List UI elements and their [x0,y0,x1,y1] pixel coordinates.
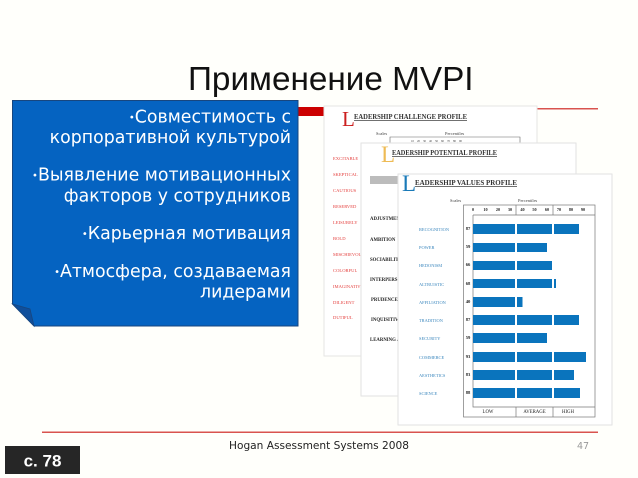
point 1: Совместимость с [135,108,291,128]
scores: 59 [466,244,471,249]
scale labels: TRADITION [419,318,444,323]
scale labels: ALTRUISTIC [419,282,444,287]
scores: 40 [466,299,471,304]
scale labels: DUTIFUL [333,315,353,320]
panel: key points [12,100,298,326]
page heading [381,142,497,167]
scale labels: RECOGNITION [419,227,450,232]
page heading: EADERSHIP POTENTIAL PROFILE [392,149,497,157]
scale labels [419,227,450,396]
scale labels: BOLD [333,236,346,241]
point 1: • [129,112,135,124]
scale header [376,131,520,144]
page heading: EADERSHIP CHALLENGE PROFILE [354,113,467,121]
point 4: лидерами [200,282,291,302]
report page: potential profile [361,142,576,396]
report page: values profile [398,171,612,425]
page badge: с. 78 [24,452,61,470]
page badge [5,446,80,474]
title: Применение MVPI [188,61,474,98]
scale header: Scales [376,131,388,136]
percentile axis: 30 [508,207,512,212]
percentile axis: 80 [569,207,573,212]
point 2: факторов у сотрудников [64,186,291,206]
scale labels: LEARNING APPROACH [370,338,424,343]
bar chart [473,224,586,398]
scores [466,226,471,395]
percentile axis: 0 [472,207,474,212]
percentile axis: 60 [545,207,549,212]
page heading [402,171,517,196]
scale labels: PRUDENCE [371,298,398,303]
scores: 66 [466,262,471,267]
page heading: L [342,107,355,131]
scale labels: ADJUSTMENT [370,217,404,222]
page heading: EADERSHIP VALUES PROFILE [415,179,517,187]
percentile axis: 40 [520,207,525,212]
scale labels: COMMERCE [419,355,444,360]
scores: 68 [466,281,471,286]
report page: challenge profile [324,106,537,356]
scores: 87 [466,317,471,322]
scale labels: COLORFUL [333,268,357,273]
scale labels [333,156,365,320]
scale header: 10 20 30 40 50 60 70 80 90 [411,139,462,143]
percentile axis: 70 [557,207,561,212]
point 3: Карьерная мотивация [88,224,291,244]
scale header: Scales [450,198,462,203]
chart frame [464,205,595,417]
percentile axis: 10 [483,207,488,212]
scale labels: INQUISITIVE [371,318,402,323]
red rule top [297,107,598,116]
scores: 87 [466,226,471,231]
page heading [342,107,467,131]
scores: 93 [466,354,471,359]
scale labels: SCIENCE [419,391,438,396]
percentile axis: 50 [532,207,537,212]
grey header bar [370,176,398,184]
slide number: 47 [577,441,589,452]
point 4: Атмосфера, создаваемая [60,262,291,282]
point 2: Выявление мотивационных [38,166,291,186]
scores: 88 [466,390,471,395]
scale labels: SECURITY [419,336,441,341]
scores: 83 [466,372,471,377]
point 1: корпоративной культурой [50,128,291,148]
scale labels: AFFILIATION [419,300,447,305]
scale header: Percentiles [445,131,465,136]
scale labels: RESERVED [333,204,357,209]
band labels: HIGH [562,410,575,415]
scale labels: HEDONISM [419,263,442,268]
scale header: Percentiles [518,198,538,203]
scores: 59 [466,335,471,340]
scale labels: AMBITION [370,238,396,243]
scale labels [370,217,424,343]
page heading: L [381,142,395,167]
scale labels: CAUTIOUS [333,188,357,193]
band labels: AVERAGE [523,410,546,415]
scale labels: SOCIABILITY [370,258,403,263]
scale labels: AESTHETICS [419,373,446,378]
scale labels: MISCHIEVOUS [333,252,365,257]
percentile axis [472,207,585,212]
scale labels: IMAGINATIVE [333,284,364,289]
point 3: • [82,229,88,240]
band labels [483,410,575,415]
scale labels: INTERPERSONAL [370,278,411,283]
scale labels: SKEPTICAL [333,172,358,177]
page heading: L [402,171,416,196]
point 2: • [32,170,38,182]
scale labels: LEISURELY [333,220,358,225]
scale labels: DILIGENT [333,300,355,305]
footer text: Hogan Assessment Systems 2008 [229,440,409,452]
scale labels: POWER [419,245,434,250]
band labels: LOW [483,410,494,415]
scale labels: EXCITABLE [333,156,358,161]
percentile axis: 90 [581,207,585,212]
red rule bottom [42,432,598,433]
scale header [450,198,538,203]
point 4: • [54,267,60,278]
percentile axis: 20 [496,207,500,212]
